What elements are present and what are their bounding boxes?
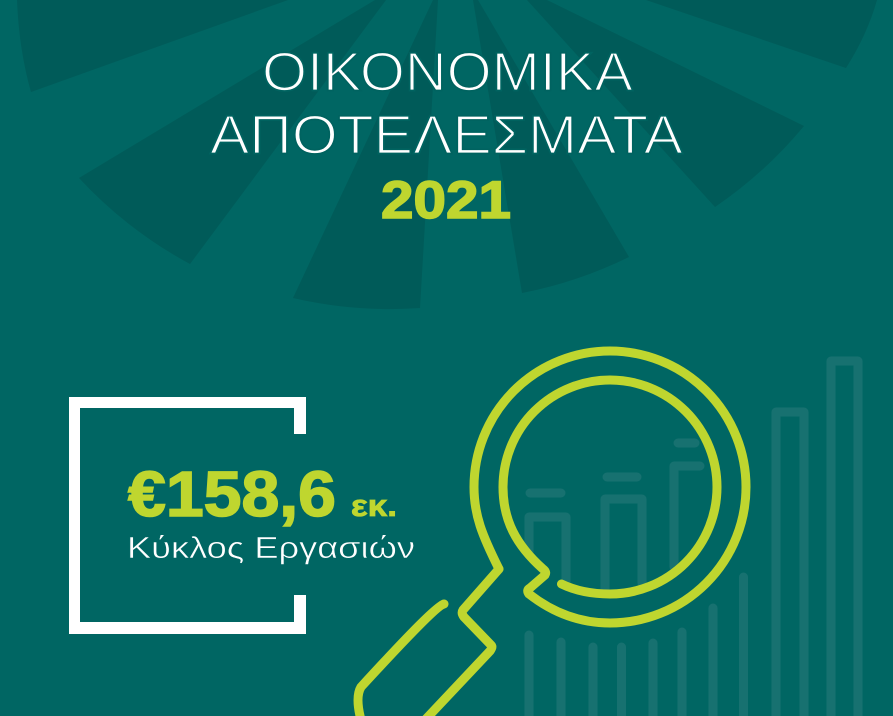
icon: magnifying glass <box>358 351 746 716</box>
label: turnover: Κύκλος Εργασιών <box>127 530 415 565</box>
title <box>210 40 683 230</box>
unit: εκ. <box>351 488 397 523</box>
handle <box>425 569 499 716</box>
background sunburst rays <box>17 0 877 309</box>
title line 1: ΟΙΚΟΝΟΜΙΚΑ <box>262 40 633 102</box>
value: €158,6 <box>128 458 336 530</box>
revenue figure <box>127 458 415 565</box>
title year: 2021 <box>381 171 511 230</box>
bar caps <box>530 443 695 493</box>
lens rings <box>474 351 746 623</box>
bars inside lens <box>529 466 700 590</box>
title line 2: ΑΠΟΤΕΛΕΣΜΑΤΑ <box>210 104 683 166</box>
tall bars <box>831 361 858 716</box>
background bar chart <box>529 361 858 716</box>
panel: revenue frame <box>69 397 306 634</box>
thin bars <box>529 577 744 716</box>
